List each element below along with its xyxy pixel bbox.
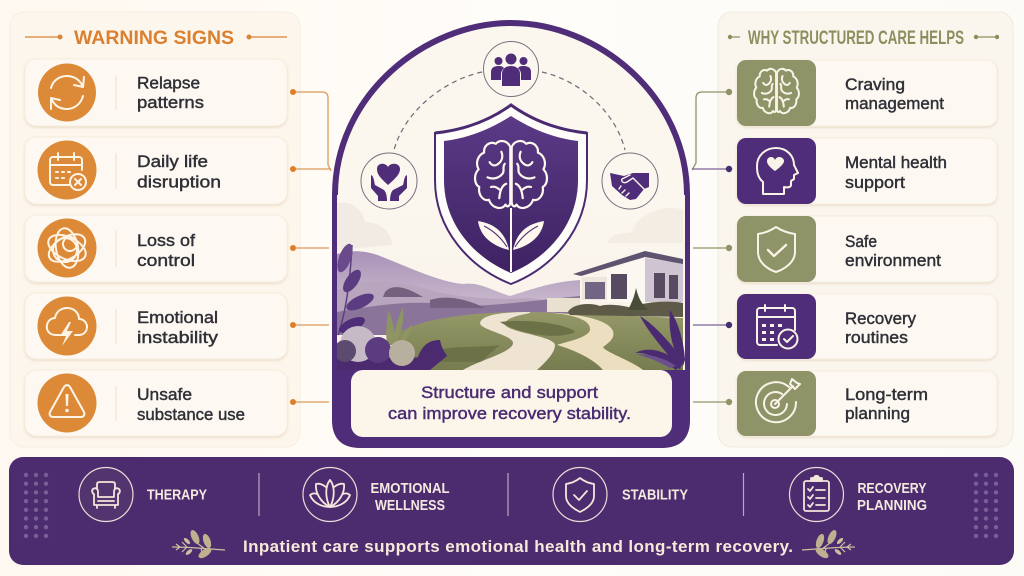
illustration: landscape with path and house bbox=[334, 195, 686, 370]
icon: warning triangle bbox=[50, 385, 84, 417]
card: emotional instability: Emotional bbox=[137, 309, 218, 327]
callout: structure and support: can improve recovery stability. bbox=[388, 405, 631, 423]
item: emotional wellness: WELLNESS bbox=[375, 497, 445, 514]
item: recovery planning: PLANNING bbox=[857, 497, 927, 514]
card: relapse patterns: Relapse bbox=[137, 74, 200, 92]
heading: warning signs: WARNING SIGNS bbox=[74, 28, 234, 49]
card: long-term planning bbox=[737, 371, 997, 436]
item: emotional wellness bbox=[303, 468, 450, 522]
dot pattern right bbox=[974, 473, 998, 538]
card: loss of control: Loss of bbox=[137, 232, 195, 250]
connectors: warning signs to centre bbox=[290, 89, 331, 405]
callout: structure and support: Structure and support bbox=[421, 384, 598, 402]
item: stability bbox=[553, 468, 688, 522]
callout: structure and support bbox=[351, 370, 672, 437]
icon: right sprig bbox=[802, 529, 855, 560]
icon: handshake bbox=[602, 153, 658, 209]
item: emotional wellness: EMOTIONAL bbox=[370, 480, 450, 497]
icon: brain bbox=[754, 69, 799, 113]
card: safe environment: Safe bbox=[845, 233, 877, 251]
card: daily life disruption: Daily life bbox=[137, 153, 208, 171]
icon: calendar with check bbox=[757, 305, 798, 348]
icon: clipboard checklist bbox=[804, 476, 829, 511]
card: daily life disruption bbox=[25, 137, 287, 204]
item: stability: STABILITY bbox=[622, 486, 688, 504]
card: craving management bbox=[737, 60, 997, 126]
dot pattern left bbox=[24, 473, 48, 538]
icon: left sprig bbox=[172, 529, 225, 560]
icon: storm cloud bbox=[47, 308, 87, 335]
banner: care pillars bbox=[9, 457, 1014, 565]
icon: shield check bbox=[566, 478, 594, 512]
heading: warning signs bbox=[25, 28, 287, 49]
card: recovery routines bbox=[737, 294, 997, 359]
panel: why structured care helps bbox=[718, 12, 1013, 447]
icon: hands holding heart bbox=[361, 153, 417, 209]
item: recovery planning: RECOVERY bbox=[858, 480, 926, 497]
icon: armchair bbox=[92, 482, 120, 508]
card: mental health support: Mental health bbox=[845, 154, 947, 172]
icon: calendar with cross bbox=[50, 153, 86, 190]
card: mental health support bbox=[737, 138, 997, 204]
icon: lotus bbox=[310, 480, 350, 507]
icon: relapse cycle arrows bbox=[51, 76, 84, 109]
card: loss of control: control bbox=[137, 252, 195, 270]
card: craving management: management bbox=[845, 95, 944, 113]
panel: central arch bbox=[334, 23, 687, 445]
card: unsafe substance use: Unsafe bbox=[137, 386, 192, 404]
item: recovery planning bbox=[790, 468, 927, 522]
icon: head with heart bbox=[757, 148, 798, 194]
card: unsafe substance use: substance use bbox=[137, 406, 245, 424]
card: recovery routines: routines bbox=[845, 329, 908, 347]
icon: community group bbox=[484, 42, 538, 96]
card: safe environment bbox=[737, 216, 997, 282]
plant: agave bbox=[635, 310, 685, 370]
icon: tangled knot bbox=[44, 226, 90, 270]
card: craving management: Craving bbox=[845, 76, 905, 94]
shield with brain and sprout bbox=[435, 105, 587, 284]
card: mental health support: support bbox=[845, 174, 905, 192]
card: unsafe substance use bbox=[25, 370, 287, 436]
card: recovery routines: Recovery bbox=[845, 310, 917, 328]
card: emotional instability: instability bbox=[137, 329, 219, 347]
icon: target with arrow bbox=[756, 379, 800, 422]
card: relapse patterns: patterns bbox=[137, 94, 204, 112]
dashed support arc bbox=[394, 72, 625, 150]
item: therapy: THERAPY bbox=[147, 486, 207, 504]
connectors: centre to structured care bbox=[692, 89, 732, 405]
card: relapse patterns bbox=[25, 59, 287, 126]
panel: warning signs bbox=[10, 12, 300, 447]
house bbox=[547, 251, 683, 317]
tagline: Inpatient care supports emotional health and long-term recovery. bbox=[243, 537, 793, 556]
card: emotional instability bbox=[25, 293, 287, 359]
card: long-term planning: planning bbox=[845, 405, 910, 423]
icon: shield with check bbox=[758, 227, 795, 272]
plant: lavender and rocks bbox=[334, 242, 447, 370]
card: safe environment: environment bbox=[845, 252, 941, 270]
card: long-term planning: Long-term bbox=[845, 386, 928, 404]
item: therapy bbox=[79, 468, 207, 522]
card: daily life disruption: disruption bbox=[137, 174, 221, 192]
card: loss of control bbox=[25, 215, 287, 282]
